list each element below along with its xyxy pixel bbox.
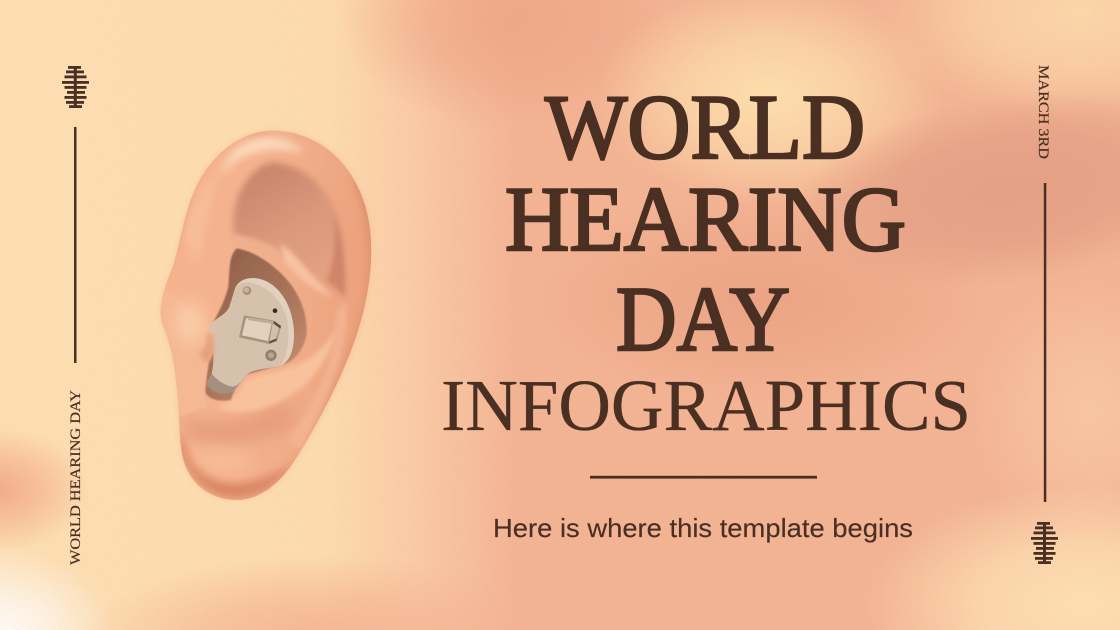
title line: infographics: INFOGRAPHICS: [441, 365, 971, 446]
lobe shade: [180, 435, 291, 500]
side label: world hearing day: WORLD HEARING DAY: [68, 390, 84, 565]
title line: world: WORLD: [545, 76, 865, 178]
subtitle: Here is where this template begins: [493, 513, 913, 543]
hearing aid body: [206, 278, 294, 394]
ear shape: [160, 130, 372, 500]
icon: sound wave, bottom right: [1031, 522, 1058, 564]
antihelix band: [290, 306, 347, 446]
upper ear hollow: [230, 160, 339, 284]
left vertical line: [74, 127, 76, 363]
side label: march 3rd: MARCH 3RD: [1035, 65, 1051, 159]
left edge shade: [184, 206, 189, 226]
helix highlight: [220, 138, 303, 177]
title line: hearing: HEARING: [505, 168, 906, 270]
ear canal shadow: [205, 248, 307, 401]
mic hole: [273, 308, 277, 313]
battery door: [239, 315, 281, 344]
lower conch rim highlight: [220, 332, 335, 413]
illustration: ear with hearing aid: [160, 130, 372, 500]
antihelix ridge highlight: [280, 243, 333, 297]
icon: sound wave, top left: [62, 66, 89, 108]
ear soft shadow: [164, 133, 369, 497]
title: [441, 76, 971, 446]
title divider: [590, 476, 817, 479]
right vertical line: [1044, 183, 1046, 502]
title line: day: DAY: [616, 268, 790, 370]
screw button: [243, 286, 251, 295]
tragus fold over the aid: [179, 328, 214, 415]
lobe fold shadow: [183, 403, 297, 443]
right rim shade: [326, 182, 371, 405]
volume button: [265, 350, 277, 361]
